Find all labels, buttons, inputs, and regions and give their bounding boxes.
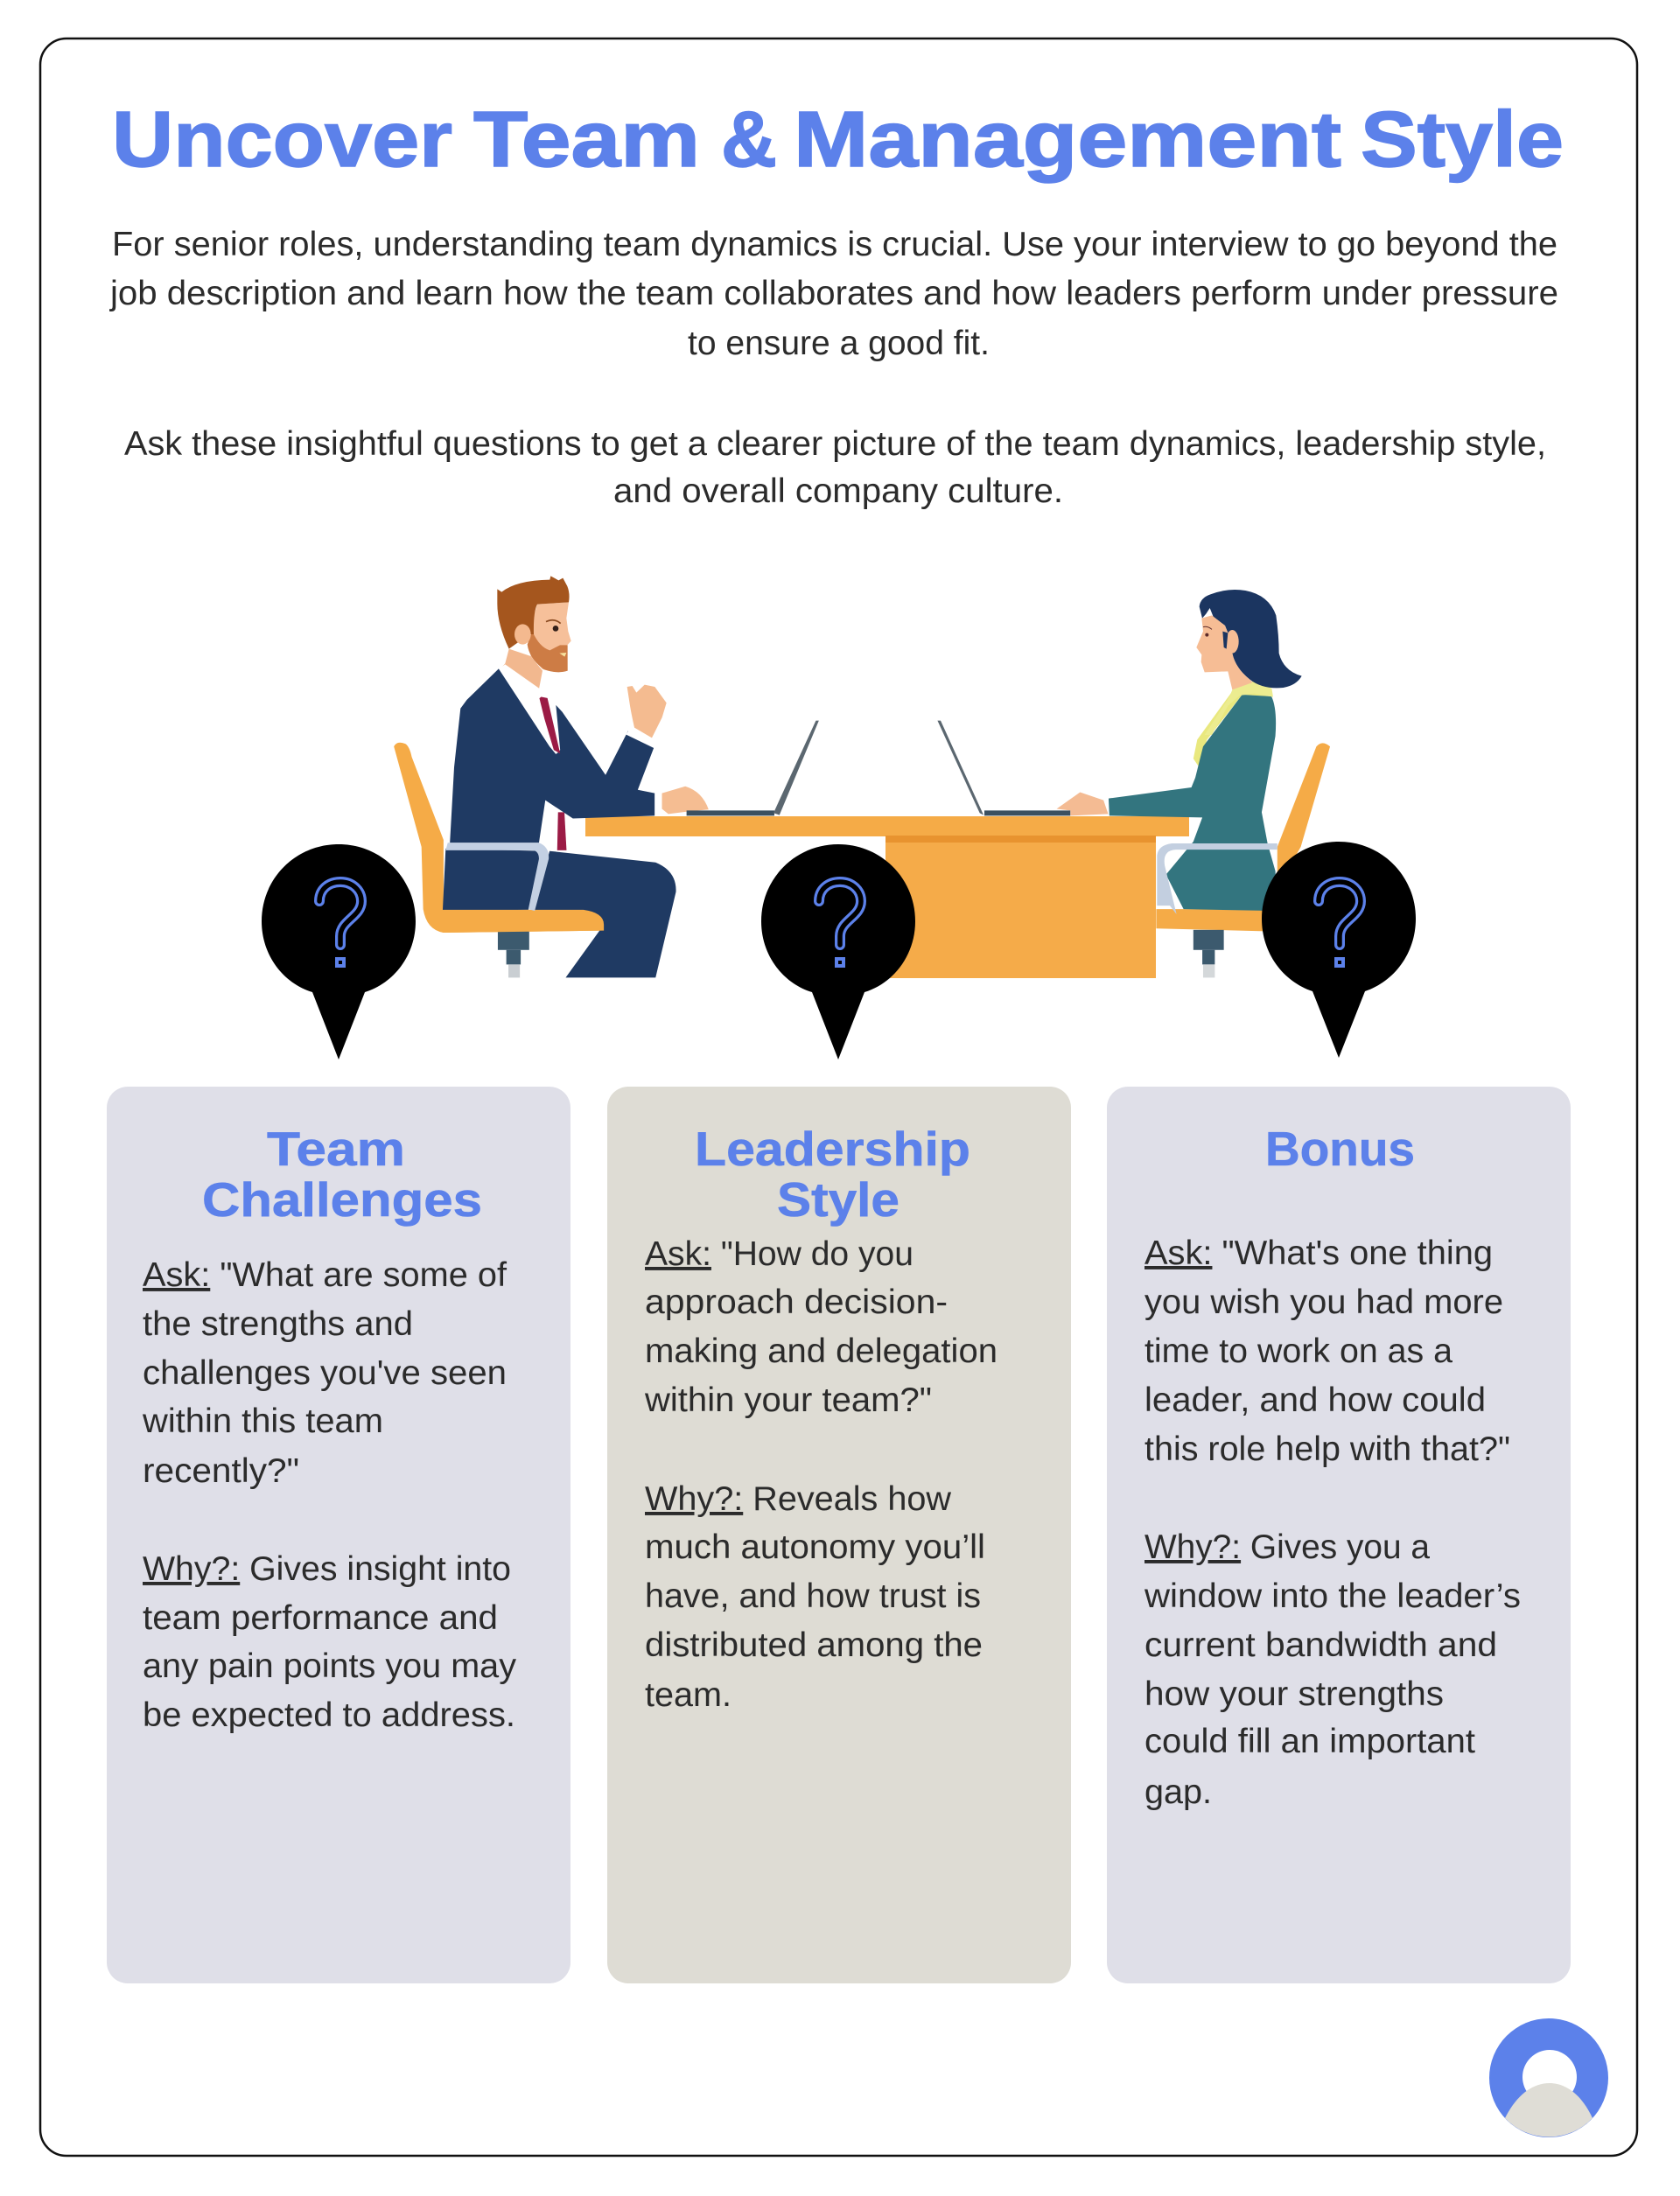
body text: leadership style: within your team?" <box>644 1381 932 1419</box>
title: Uncover <box>112 96 452 184</box>
illustration: interview at a desk <box>394 576 1330 978</box>
man in navy suit <box>394 576 819 977</box>
body text: bonus <box>1144 1234 1521 1811</box>
heading: leadership style: Leadership <box>695 1122 970 1176</box>
title <box>112 96 1564 184</box>
body text: team challenges: any pain points you may <box>143 1647 516 1685</box>
body text: team challenges: Ask: "What are some of <box>143 1256 507 1294</box>
body text: team challenges: recently?" <box>143 1452 299 1490</box>
body text: bonus: current bandwidth and <box>1144 1626 1497 1664</box>
body text: bonus: Ask: "What's one thing <box>1144 1234 1493 1272</box>
panel: team challenges <box>107 1087 570 1983</box>
body text: leadership style: approach decision- <box>645 1283 948 1321</box>
body text: team challenges: team performance and <box>143 1599 498 1637</box>
body text: bonus: window into the leader’s <box>1144 1577 1521 1615</box>
desk <box>585 816 1189 978</box>
body text: leadership style: have, and how trust is <box>645 1577 981 1615</box>
heading: team challenges: Team <box>267 1122 405 1176</box>
body text: team challenges <box>142 1256 516 1734</box>
body text: bonus: this role help with that?" <box>1144 1430 1510 1468</box>
intro text: For senior roles, understanding team dynamics is crucial. Use your interview to go beyond the <box>112 226 1558 263</box>
pin: question marker 1 <box>262 844 416 1060</box>
title: Team <box>473 96 700 184</box>
heading: team challenges <box>202 1122 482 1227</box>
woman in teal jacket <box>937 590 1330 977</box>
body text: leadership style: team. <box>645 1676 732 1714</box>
intro text: to ensure a good fit. <box>688 325 990 362</box>
body text: bonus: time to work on as a <box>1144 1332 1452 1370</box>
body text: leadership style: Why?: Reveals how <box>645 1480 952 1518</box>
body text: team challenges: challenges you've seen <box>143 1354 507 1392</box>
body text: team challenges: the strengths and <box>143 1305 413 1343</box>
intro text <box>109 226 1558 510</box>
pin: question marker 3 <box>1262 842 1416 1058</box>
body text: team challenges: be expected to address. <box>143 1696 515 1734</box>
body text: leadership style: much autonomy you’ll <box>645 1528 985 1566</box>
body text: bonus: how your strengths <box>1144 1675 1444 1713</box>
body text: leadership style: making and delegation <box>645 1332 998 1370</box>
intro text: job description and learn how the team collaborates and how leaders perform under pressure <box>109 275 1558 312</box>
heading: team challenges: Challenges <box>202 1172 482 1227</box>
panel: bonus <box>1107 1087 1571 1983</box>
body text: leadership style: Ask: "How do you <box>645 1235 914 1273</box>
body text: leadership style <box>644 1235 998 1714</box>
woman's head and collar <box>1196 590 1302 735</box>
body text: bonus: Why?: Gives you a <box>1144 1528 1430 1566</box>
title: Management <box>794 96 1341 184</box>
heading: leadership style <box>695 1122 970 1227</box>
title: Style <box>1361 96 1564 184</box>
intro text: and overall company culture. <box>613 472 1063 510</box>
body text: bonus: you wish you had more <box>1144 1283 1503 1321</box>
panel: leadership style <box>607 1087 1071 1983</box>
title: & <box>721 96 777 184</box>
intro text: Ask these insightful questions to get a clearer picture of the team dynamics, leadership style, <box>124 425 1546 463</box>
body text: leadership style: distributed among the <box>645 1626 983 1664</box>
man's head and raised hand <box>497 576 667 738</box>
pin: question marker 2 <box>761 844 915 1060</box>
body text: bonus: could fill an important <box>1144 1723 1475 1760</box>
heading: leadership style: Style <box>777 1172 900 1227</box>
body text: bonus: leader, and how could <box>1144 1381 1486 1419</box>
body text: team challenges: within this team <box>142 1402 383 1440</box>
body text: team challenges: Why?: Gives insight into <box>143 1550 511 1588</box>
heading: bonus: Bonus <box>1265 1122 1415 1176</box>
icon: user avatar <box>1489 2018 1608 2137</box>
body text: bonus: gap. <box>1144 1773 1212 1811</box>
